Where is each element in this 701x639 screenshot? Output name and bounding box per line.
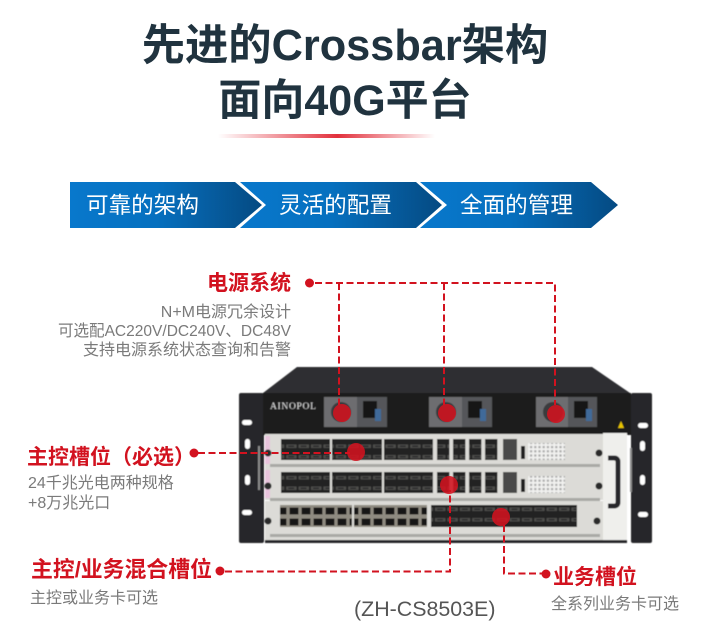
label: mixed slot: [30, 557, 212, 607]
marker: supervisor slot: [347, 443, 365, 461]
power module 2: [429, 397, 492, 427]
label: supervisor slot: [27, 445, 195, 512]
arrow: full management: 全面的管理: [460, 193, 573, 218]
power panel: [263, 393, 631, 435]
connector: mixed slot: [216, 490, 450, 576]
arrow: flexible configuration: 灵活的配置: [279, 193, 392, 218]
title: [142, 22, 548, 125]
marker: service slot: [492, 508, 510, 526]
connector: supervisor slot: [190, 448, 350, 458]
supervisor card 2: [264, 467, 603, 501]
label: mixed slot: 主控/业务混合槽位: [31, 557, 212, 582]
title underline: [218, 134, 435, 138]
label: power system: 支持电源系统状态查询和告警: [83, 341, 291, 359]
supervisor card 1: [264, 434, 603, 467]
model number: (ZH-CS8503E): [354, 597, 495, 621]
label: supervisor slot: 24千兆光电两种规格: [28, 474, 174, 492]
arrow: full management: [420, 182, 618, 228]
marker: power module 3: [547, 405, 565, 423]
marker: mixed slot: [440, 476, 458, 494]
arrow: flexible configuration: [240, 182, 442, 228]
right mounting ear: [630, 393, 652, 543]
brand label: AINOPOL: [270, 402, 317, 412]
marker: power module 2: [438, 404, 456, 422]
feature arrows: [70, 182, 618, 228]
label: service slot: 全系列业务卡可选: [551, 595, 679, 613]
power module 1: [324, 397, 387, 427]
title: 面向40G平台: [218, 77, 472, 125]
label: power system: 电源系统: [207, 271, 291, 295]
label: supervisor slot: +8万兆光口: [28, 494, 110, 512]
arrow: reliable architecture: [70, 182, 262, 228]
label: power system: 可选配AC220V/DC240V、DC48V: [58, 322, 291, 340]
label: mixed slot: 主控或业务卡可选: [30, 589, 158, 607]
title: 先进的Crossbar架构: [142, 22, 548, 70]
left mounting ear: [239, 393, 264, 543]
connector: power system: [305, 278, 555, 405]
service card: [264, 501, 603, 540]
chassis: [239, 367, 652, 543]
connector: service slot: [504, 525, 550, 578]
warning label: [618, 421, 624, 428]
label: power system: N+M电源冗余设计: [161, 302, 291, 321]
chassis bottom edge: [265, 540, 627, 543]
label: supervisor slot: 主控槽位（必选）: [27, 445, 195, 469]
label: power system: [58, 271, 291, 359]
marker: power module 1: [333, 404, 351, 422]
side white panel with handle: [603, 433, 627, 541]
label: service slot: 业务槽位: [553, 565, 637, 589]
label: service slot: [551, 565, 679, 613]
arrow: reliable architecture: 可靠的架构: [86, 193, 199, 218]
chassis top cover: [263, 367, 630, 393]
power module 3: [536, 397, 597, 427]
